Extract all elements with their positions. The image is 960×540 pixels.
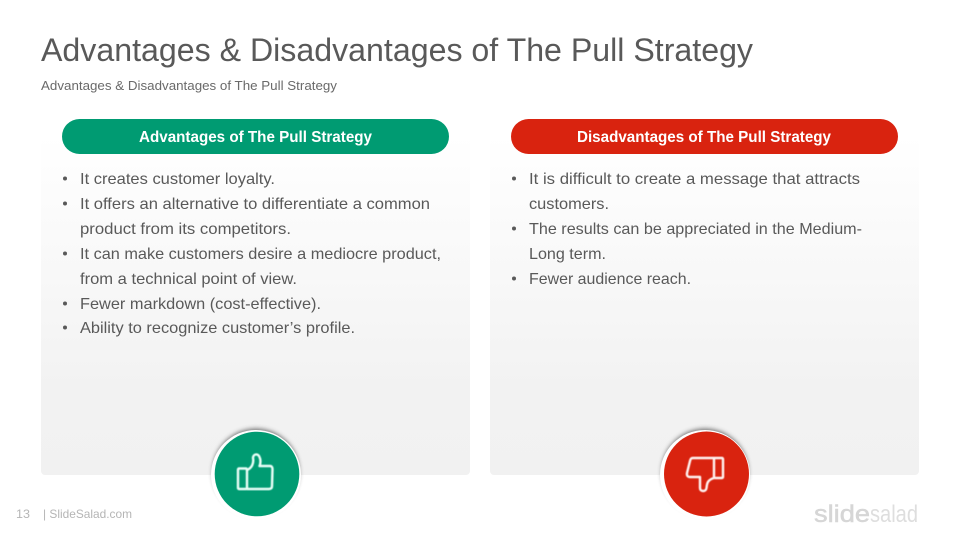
advantages bullet list: product from its competitors. (80, 221, 291, 238)
panel background (490, 136, 919, 475)
heading pill: advantages (62, 119, 449, 154)
disadvantages bullet list (512, 171, 862, 288)
panel background (41, 136, 470, 475)
icon: thumbs down badge (660, 428, 750, 520)
disadvantages bullet list: It is difficult to create a message that attracts (529, 171, 860, 188)
disadvantages bullet list: The results can be appreciated in the Medium- (529, 221, 862, 238)
panel: disadvantages (490, 119, 919, 520)
subtitle: Advantages & Disadvantages of The Pull Strategy (41, 79, 338, 93)
advantages bullet list: It offers an alternative to differentiate a common (80, 196, 430, 213)
disadvantages bullet list: Long term. (529, 246, 606, 263)
advantages bullet list (63, 171, 441, 337)
advantages bullet list: Ability to recognize customer’s profile. (80, 320, 355, 337)
title: Advantages & Disadvantages of The Pull Strategy (41, 32, 753, 68)
logo: slidesalad: salad (870, 501, 918, 528)
footer source: | SlideSalad.com (43, 507, 132, 521)
logo: slidesalad (814, 501, 918, 528)
advantages bullet list: Fewer markdown (cost-effective). (80, 296, 321, 313)
heading pill: disadvantages (511, 119, 898, 154)
advantages bullet list: It can make customers desire a mediocre product, (80, 246, 441, 263)
disadvantages bullet list: customers. (529, 196, 609, 213)
heading pill: disadvantages: Disadvantages of The Pull Strategy (577, 129, 831, 146)
advantages bullet list: from a technical point of view. (80, 271, 297, 288)
logo: slidesalad: slide (814, 501, 870, 528)
disadvantages bullet list: Fewer audience reach. (529, 271, 691, 288)
advantages bullet list: It creates customer loyalty. (80, 171, 275, 188)
page number: 13 (16, 507, 30, 521)
icon: thumbs up badge (211, 428, 301, 520)
panel: advantages (41, 119, 470, 520)
heading pill: advantages: Advantages of The Pull Strategy (139, 129, 372, 146)
